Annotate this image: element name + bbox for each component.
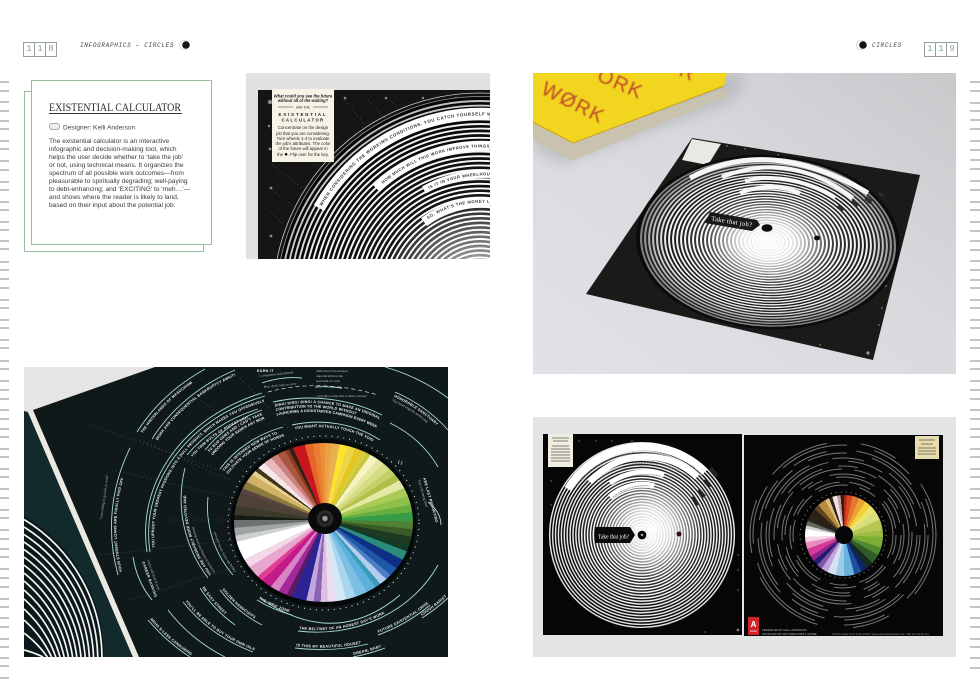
- poster credits: [762, 628, 930, 636]
- book cover lettering: WØRK: [538, 78, 609, 128]
- icon: black section dot right: [856, 40, 867, 50]
- running header: left: INFOGRAPHICS – CIRCLES: [80, 42, 174, 49]
- body text: based on their input about the potential job.: [49, 202, 175, 209]
- colour wheel: [234, 443, 413, 602]
- instruction card: Concentrate on the design: [278, 125, 329, 130]
- body text: to debt-enhancing; and ‘EXCITING’ to ‘meh…’—: [49, 186, 190, 193]
- arcs: top: [257, 369, 382, 441]
- arcs: left: YOU ARE PROBABLY MORE DEVOTED AND: [184, 496, 211, 576]
- instruction card: CALCULATOR: [281, 117, 325, 122]
- outer arcs: top left: YOU TRIM BOLTS OF POCKET LINT: [190, 416, 248, 456]
- page number 118: 1: [26, 44, 32, 54]
- body text: infographic and decision-making tool, which: [49, 146, 177, 153]
- arcs: top: LAUNCHING A KICKSTARTER CAMPAIGN EVERY WEEK: [276, 409, 378, 428]
- designer credit: [49, 123, 135, 132]
- outer arcs: top left: THE HINTERLANDS OF MASOCHISM: [140, 381, 192, 433]
- instruction card: What could you see the future: [274, 94, 333, 98]
- arcs: left: Everyone is looking into your direction: [192, 526, 215, 573]
- wheel edge dots: [268, 97, 473, 237]
- arcs: top: didn't they'd be blessed: [316, 369, 348, 373]
- instruction card: of the future will appear in: [278, 146, 328, 151]
- arcs: top right: [384, 367, 448, 525]
- Adobe logo: A: [751, 620, 757, 629]
- band 2 question: HOW MUCH WILL THIS WORK IMPROVE THINGS: [382, 144, 490, 184]
- striped calculator wheel: [273, 93, 687, 507]
- panel: photo detail of calculator wheel: [246, 73, 490, 259]
- arcs: left: [99, 448, 236, 600]
- arcs: bottom: THE 'MEH' ZONE: [260, 596, 290, 612]
- flag label: Take that job?: Take that job?: [598, 534, 629, 540]
- wheel hub: [835, 526, 853, 544]
- page number 118: 1: [37, 44, 43, 54]
- center hole and indicator: [638, 531, 682, 539]
- dark poster: [33, 367, 448, 657]
- arcs: left: You're still kind of poor: [146, 559, 161, 592]
- tiny band text: [575, 452, 695, 497]
- outer arcs: top left: CULTIVATE YOUR SENSE OF HONOR: [226, 434, 284, 474]
- poster edge dots: [659, 145, 890, 355]
- body text: pleasurable to spiritually degrading; well-paying: [49, 178, 188, 185]
- arcs: top: unpredictable in the: [316, 374, 343, 378]
- instruction card: the ●. Flip over for the key.: [277, 152, 329, 158]
- page number 119: 1: [927, 44, 933, 54]
- arcs: bottom: MEHS S-LESS CONSUMING: [150, 618, 192, 655]
- running header: right: CIRCLES: [872, 42, 902, 49]
- instruction card: job that you are considering.: [275, 131, 330, 136]
- arcs: top: "Actually, really that it takes courage": [316, 394, 368, 399]
- colour wheel on right poster: [805, 495, 883, 576]
- arcs: top: spectrum of work: [316, 379, 340, 383]
- arcs: top right: [ ]: [398, 460, 403, 465]
- instruction card: ASK THE: [296, 106, 310, 110]
- body text: or not, using technical means. It organizes the: [49, 162, 184, 169]
- left poster with stripes: [24, 411, 133, 657]
- instruction card: [915, 436, 939, 459]
- outer arcs: top left: TO BUD GEMS AND I CAN'T TAKE: [208, 412, 262, 452]
- arcs: left: Taking the world, slowly and well: [214, 532, 236, 572]
- instruction card: Turn wheels 1-4 to evaluate: [277, 136, 330, 141]
- white question arcs: [690, 160, 868, 198]
- arcs: bottom: [148, 564, 448, 657]
- page number 119: [924, 42, 957, 57]
- dotted ring and dark surround of wheel: [228, 436, 419, 610]
- flag label: Take that job?: Take that job?: [711, 216, 753, 229]
- icon: black section dot left: [179, 40, 190, 50]
- arcs: top: Hey- don't look so sorry: [264, 382, 297, 389]
- outer arcs: top left: [136, 368, 284, 552]
- heading: EXISTENTIAL CALCULATOR: [49, 100, 181, 114]
- margin ticks: left: [0, 82, 9, 678]
- page number 119: 9: [949, 44, 955, 54]
- poster credits: Find the future in the Circle of Meh: www.existentialcalculator.com · Flip over for the key: [832, 633, 930, 636]
- arcs: bottom: GOLDEN HANDCUFFS: [222, 588, 256, 618]
- arcs: top: DING! DING! DING! A CHANCE TO MAKE AN ORIGINAL: [274, 400, 380, 420]
- Adobe logo: [748, 617, 759, 635]
- panel: existential calculator description: [31, 80, 212, 245]
- arcs: top: YOU MIGHT ACTUALLY TOUCH THE VOID: [294, 424, 374, 441]
- back frame of text panel: [24, 91, 204, 252]
- Adobe logo: Adobe: [750, 630, 758, 633]
- black poster: [586, 138, 920, 360]
- arcs: bottom: THE BELTWAY OF AN HONEST DAY'S WORK: [299, 611, 385, 630]
- body text: The existential calculator is an interactive: [49, 138, 169, 145]
- panel: close-up of colour wheel side: [24, 367, 448, 657]
- arcs: left: CAREER BANKING: [141, 561, 158, 598]
- striped wheel: [632, 148, 904, 336]
- panel: both sides of calculator: [533, 417, 956, 657]
- right poster: text rings: [744, 435, 943, 636]
- arcs: bottom: BE EASY STREET: [202, 586, 227, 614]
- arcs: top right: Your heart sings the world song: [392, 399, 428, 423]
- arcs: bottom: IS THIS MY BEAUTIFUL HOUSE?: [296, 641, 360, 648]
- wheel hub: [308, 503, 342, 534]
- wheel surround and dotted ring: [797, 489, 889, 581]
- arcs: left: "I am willing to go back to work": [99, 474, 109, 520]
- white question arcs: [568, 447, 705, 497]
- page number 118: [23, 42, 56, 57]
- instruction card: EXISTENTIAL: [279, 112, 327, 117]
- flag label: Take that job?: [705, 212, 760, 231]
- poster credits: PRODUCED BY ART DIRECTORS & ADOBE: [762, 632, 817, 636]
- wheel number tags: [691, 468, 718, 506]
- arcs: top right: HONORABLE SANCTUARY: [394, 394, 438, 425]
- flag label: Take that job?: [595, 527, 635, 543]
- page number 119: 1: [938, 44, 944, 54]
- instruction card: without all of the waiting?: [278, 98, 329, 103]
- instruction card: [682, 139, 721, 165]
- arcs: left: YOUR STUDENT LOANS ARE FINALLY PAID OFF: [114, 478, 124, 572]
- outer arcs: top left: WORK AND CONSEQUENTIAL BANKRUPTCY AWAIT!: [156, 374, 236, 440]
- arcs: top right: Fine with being kind: [417, 479, 429, 508]
- body text: and shows where the reader is likely to land,: [49, 194, 179, 201]
- arcs: bottom: DREAM, BABY: [353, 644, 380, 655]
- book cover lettering: [538, 59, 699, 128]
- instruction card: [548, 434, 573, 467]
- dotted radial guide lines: [90, 378, 290, 600]
- margin ticks: right: [970, 82, 980, 668]
- body text: spectrum of all possible work outcomes—from: [49, 170, 184, 177]
- instruction card: [272, 89, 334, 162]
- instruction card: the job's attributes. The color: [276, 141, 331, 146]
- arcs: top right: ARE LAST RESORTING: [422, 477, 439, 523]
- designer credit: Designer: Kelli Anderson: [63, 124, 135, 132]
- white paper edge: [28, 410, 139, 657]
- arcs: top: CONTRIBUTION TO THE WORLD WITHOUT: [276, 405, 357, 414]
- body text: helps the user decide whether to ‘take the job’: [49, 154, 183, 161]
- arcs: top: 1 companies and talented: [259, 370, 294, 378]
- poster credits: PRESENTED BY KELLI ANDERSON: [762, 628, 807, 632]
- book: [533, 59, 745, 165]
- outer arcs: top left: THIS IS INTENDED NEW WAYS TO: [222, 432, 277, 471]
- page number 118: 8: [48, 44, 54, 54]
- panel: photo of calculator beside yellow book: [533, 73, 956, 374]
- arcs: top: EARN IT: [257, 369, 274, 373]
- center hole and indicator dot: [762, 224, 820, 240]
- body text: [49, 138, 190, 209]
- left poster: striped wheel: [543, 434, 742, 635]
- wheel number tags: [836, 192, 885, 212]
- faint dotted guide lines: [270, 100, 430, 225]
